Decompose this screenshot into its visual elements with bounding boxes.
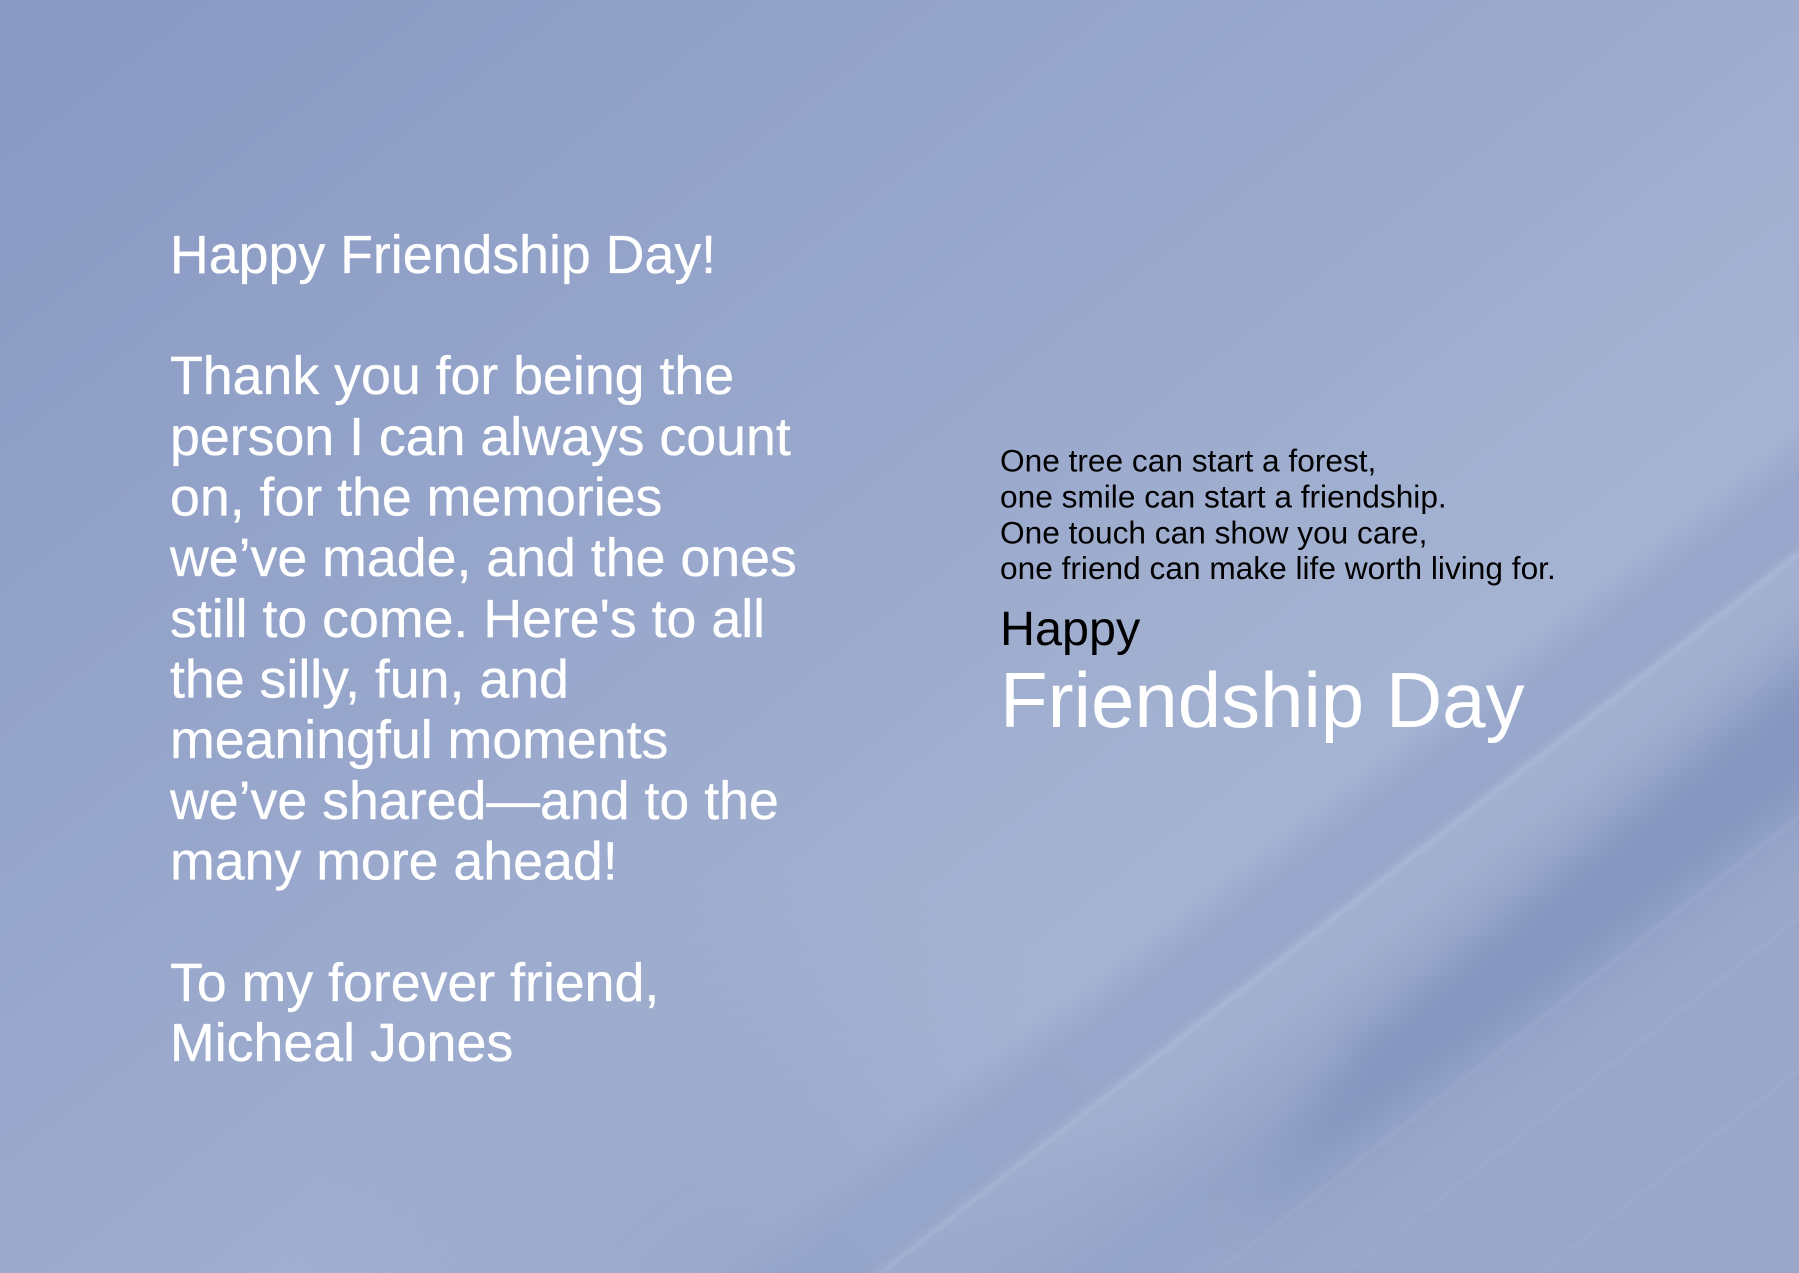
greeting heading: Happy Friendship Day! — [170, 225, 716, 285]
thank-you paragraph: still to come. Here's to all — [170, 589, 765, 649]
thank-you paragraph: Thank you for being the — [170, 346, 734, 406]
thank-you paragraph: meaningful moments — [170, 710, 668, 770]
right poem: one friend can make life worth living for. — [1000, 550, 1556, 586]
thank-you paragraph: we’ve made, and the ones — [169, 528, 797, 588]
thank-you paragraph: we’ve shared—and to the — [169, 771, 779, 831]
thank-you paragraph — [169, 346, 797, 892]
right poem: One touch can show you care, — [1000, 514, 1427, 550]
left message: greeting and note — [169, 225, 797, 1073]
right poem: one smile can start a friendship. — [1000, 478, 1447, 514]
signature: To my forever friend, — [170, 953, 659, 1013]
thank-you paragraph: many more ahead! — [170, 832, 618, 892]
closing word: Happy: Happy — [1000, 602, 1141, 656]
right poem — [1000, 442, 1556, 586]
signature — [170, 953, 659, 1073]
thank-you paragraph: person I can always count — [170, 407, 791, 467]
signature: Micheal Jones — [170, 1013, 513, 1073]
closing title: Friendship Day: Friendship Day — [1000, 656, 1525, 744]
thank-you paragraph: the silly, fun, and — [170, 650, 569, 710]
thank-you paragraph: on, for the memories — [170, 468, 662, 528]
right poem: One tree can start a forest, — [1000, 442, 1376, 478]
